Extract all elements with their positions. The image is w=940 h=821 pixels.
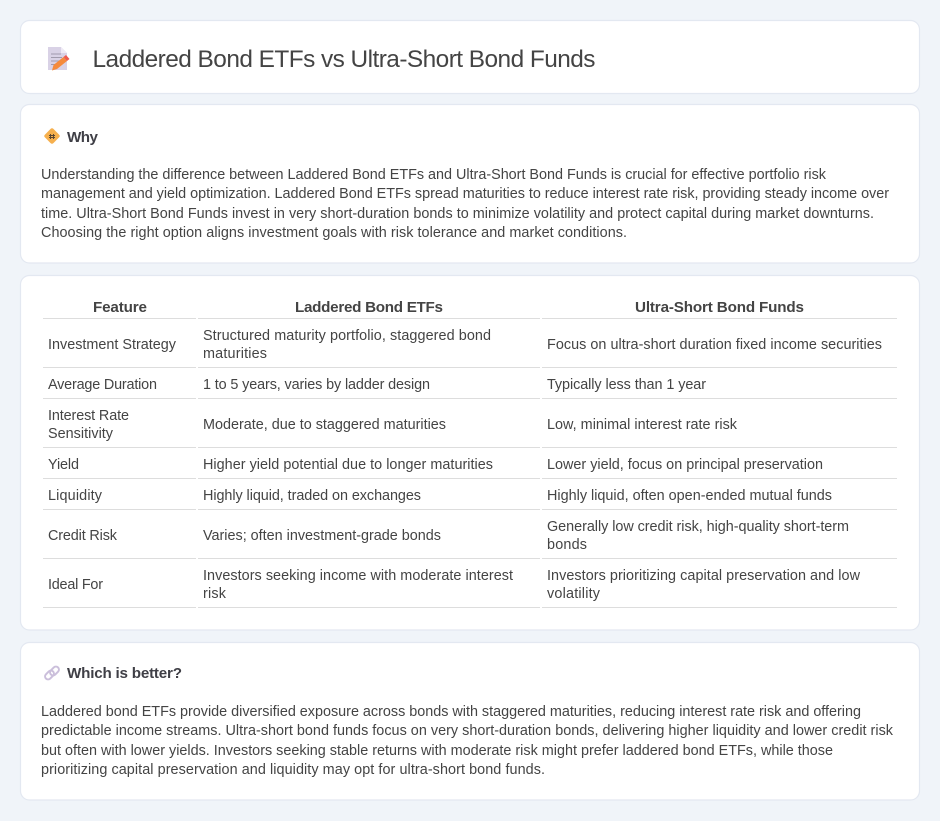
- row: liquidity: Liquidity: [48, 488, 103, 504]
- row: interest rate sensitivity: [48, 408, 738, 442]
- row: liquidity: [48, 488, 832, 504]
- panel: which is better: [20, 642, 920, 800]
- row: ideal for: Ideal For: [48, 577, 103, 593]
- text block: why paragraph: Choosing the right option aligns investment goals with risk tolerance and market conditions.: [41, 225, 627, 241]
- table header row: [93, 299, 804, 316]
- row: ideal for: Investors prioritizing capital preservation and low: [547, 568, 861, 584]
- text block: which is better paragraph: [41, 704, 894, 778]
- panel: comparison table: [20, 276, 920, 630]
- row: liquidity: Highly liquid, traded on exchanges: [203, 488, 421, 504]
- text block: why paragraph: [41, 167, 889, 241]
- row: credit risk: Varies; often investment-grade bonds: [203, 528, 441, 544]
- heading: which is better: Which is better?: [67, 665, 182, 682]
- row: yield: [48, 457, 823, 473]
- panel: title header: [20, 20, 920, 94]
- table header row: Ultra-Short Bond Funds: [635, 299, 804, 316]
- table header row: Feature: [93, 299, 147, 316]
- row: yield: Higher yield potential due to longer maturities: [203, 457, 493, 473]
- text block: why paragraph: Understanding the difference between Laddered Bond ETFs and Ultra-Short Bond Funds is crucial for effective portfolio risk: [41, 167, 827, 183]
- row: average duration: [48, 377, 706, 393]
- row: investment strategy: Focus on ultra-short duration fixed income securities: [547, 337, 882, 353]
- row: ideal for: Investors seeking income with moderate interest: [203, 568, 513, 584]
- row: interest rate sensitivity: Moderate, due to staggered maturities: [203, 417, 446, 433]
- table header row: Laddered Bond ETFs: [295, 299, 443, 316]
- row: ideal for: volatility: [547, 586, 601, 602]
- row: credit risk: bonds: [547, 537, 587, 553]
- row: credit risk: Generally low credit risk, high-quality short-term: [547, 519, 849, 535]
- text block: which is better paragraph: Laddered bond ETFs provide diversified exposure across bonds with staggered maturities, reducing interest rate risk and offering: [41, 704, 861, 720]
- row: average duration: Typically less than 1 year: [547, 377, 706, 393]
- row: yield: Lower yield, focus on principal preservation: [547, 457, 823, 473]
- text block: which is better paragraph: prioritizing capital preservation and liquidity may opt for ultra-short bond funds.: [41, 762, 545, 778]
- row: yield: Yield: [48, 457, 79, 473]
- row: ideal for: [48, 568, 861, 602]
- row: investment strategy: Investment Strategy: [48, 337, 177, 353]
- heading: why: Why: [67, 129, 99, 146]
- row: investment strategy: [48, 328, 882, 362]
- text block: why paragraph: time. Ultra-Short Bond Funds invest in very short-duration bonds to minimize volatility and protect capital during market downturns.: [41, 206, 874, 222]
- row: interest rate sensitivity: Sensitivity: [48, 426, 114, 442]
- row: credit risk: Credit Risk: [48, 528, 118, 544]
- row: investment strategy: Structured maturity portfolio, staggered bond: [203, 328, 491, 344]
- row: interest rate sensitivity: Interest Rate: [48, 408, 129, 424]
- row: average duration: 1 to 5 years, varies by ladder design: [203, 377, 430, 393]
- icon: diamond sign: [44, 128, 60, 144]
- row: credit risk: [48, 519, 849, 553]
- title: Laddered Bond ETFs vs Ultra-Short Bond Funds: [92, 46, 596, 73]
- row: average duration: Average Duration: [48, 377, 157, 393]
- text block: why paragraph: management and yield optimization. Laddered Bond ETFs spread maturities to reduce interest rate risk, providing steady income over: [41, 186, 889, 202]
- table rules: [43, 318, 897, 608]
- icon: chain link: [44, 665, 60, 681]
- row: investment strategy: maturities: [203, 346, 267, 362]
- row: liquidity: Highly liquid, often open-ended mutual funds: [547, 488, 832, 504]
- panel: why: [20, 104, 920, 263]
- text block: which is better paragraph: but often with lower yields. Investors seeking stable returns with moderate risk might prefer laddered bond ETFs, while those: [41, 743, 833, 759]
- icon: document with pencil: [48, 47, 70, 70]
- row: ideal for: risk: [203, 586, 227, 602]
- row: interest rate sensitivity: Low, minimal interest rate risk: [547, 417, 738, 433]
- text block: which is better paragraph: predictable income streams. Ultra-short bond funds focus on very short-duration bonds, delivering higher liquidity and lower credit risk: [41, 723, 894, 739]
